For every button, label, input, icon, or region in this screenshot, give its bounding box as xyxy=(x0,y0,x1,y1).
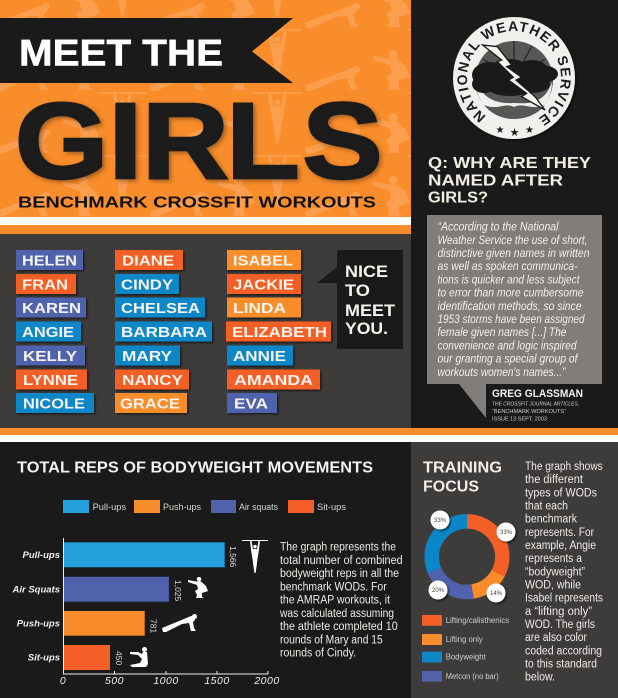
text block: training focus explanation: benchmark xyxy=(525,514,577,526)
quote box: “According to the National xyxy=(438,222,559,234)
text block: chart explanation: rounds of Mary and 15 xyxy=(280,634,383,646)
name tags column two: GRACE xyxy=(120,396,180,412)
text block: training focus explanation xyxy=(525,461,603,684)
quote box: as well as spoken communica- xyxy=(438,261,578,273)
heading: question: NAMED AFTER xyxy=(428,172,563,190)
text block: chart explanation: rounds of Cindy. xyxy=(280,648,356,660)
text block: training focus explanation: a “lifting only” xyxy=(525,606,592,618)
text block: training focus explanation: below. xyxy=(525,672,555,684)
quote attribution: THE CROSSFIT JOURNAL ARTICLES, xyxy=(492,402,579,408)
donut legend: Metcon (no bar) xyxy=(446,672,499,681)
logo: national weather service: ★ xyxy=(496,125,505,136)
bar values: 781 xyxy=(148,619,158,633)
category labels: Pull-ups xyxy=(23,550,60,561)
icon: pull-up xyxy=(242,540,268,573)
chart legend: Sit-ups xyxy=(317,502,346,513)
text block: chart explanation xyxy=(279,542,403,660)
text block: training focus explanation: Isabel represents xyxy=(525,593,603,605)
donut percentage bubbles: 14% xyxy=(490,591,503,597)
quote box: our granting a special group of xyxy=(438,354,579,366)
chart legend: Push-ups xyxy=(163,502,201,513)
text block: training focus explanation: WOD. The girls xyxy=(525,619,595,631)
chart legend: Pull-ups xyxy=(93,502,126,513)
speech bubble: nice to meet you: MEET xyxy=(345,302,395,320)
bar chart xyxy=(11,538,280,687)
bar values: 1,566 xyxy=(228,546,238,568)
name tags column one: HELEN xyxy=(22,254,77,270)
logo: national weather service: NATIONAL WEATHER SERVICE xyxy=(457,21,571,126)
ribbon banner xyxy=(0,18,293,83)
text block: chart explanation: benchmark WODs. For xyxy=(280,581,387,593)
text block: chart explanation: bodyweight reps in all the xyxy=(280,568,399,580)
name tags column two: NANCY xyxy=(122,373,183,389)
axis labels: 1500 xyxy=(204,675,230,687)
name tags column one: NICOLE xyxy=(23,396,85,412)
quote box: tions is quicker and less subject xyxy=(438,274,580,286)
heading: training focus: TRAINING xyxy=(423,460,502,477)
donut chart xyxy=(432,521,502,592)
text block: training focus explanation: “bodyweight” xyxy=(525,566,585,578)
speech bubble: nice to meet you: NICE xyxy=(345,263,388,281)
text block: training focus explanation: coded according xyxy=(525,645,602,657)
speech bubble: nice to meet you: YOU. xyxy=(345,320,388,338)
name tags column two: CHELSEA xyxy=(121,301,201,317)
name tags column three xyxy=(226,250,331,413)
quote attribution: ISSUE 13 SEPT. 2003 xyxy=(492,417,547,423)
name tags column three: EVA xyxy=(234,396,269,412)
axis labels: 1000 xyxy=(153,675,179,687)
name tags column three: ISABEL xyxy=(233,254,293,270)
quote box: workouts women's names...” xyxy=(438,367,567,379)
category labels xyxy=(11,550,60,664)
quote box: identification methods, so since xyxy=(438,301,582,313)
heading: question: GIRLS? xyxy=(428,190,488,206)
text block: training focus explanation: that each xyxy=(525,500,568,512)
bar values: 450 xyxy=(114,651,124,665)
name tags column one: KAREN xyxy=(22,301,81,317)
category labels: Sit-ups xyxy=(28,653,60,664)
logo: national weather service: ★ xyxy=(510,127,520,139)
icon: air squat xyxy=(188,577,208,598)
bar values: 1,025 xyxy=(173,580,183,602)
name tags column two: BARBARA xyxy=(121,325,208,341)
donut percentage bubbles: 33% xyxy=(500,530,513,536)
name tags column three: ELIZABETH xyxy=(232,325,327,341)
chart legend: Air squats xyxy=(239,502,278,513)
quote box: to error than more cumbersome xyxy=(438,288,584,300)
quote attribution: “BENCHMARK WORKOUTS” xyxy=(492,409,566,415)
text block: training focus explanation: The graph shows xyxy=(525,461,603,473)
text block: chart explanation: the athlete completed 10 xyxy=(280,621,398,633)
name tags column three: LINDA xyxy=(233,301,287,317)
name tags column three: ANNIE xyxy=(233,349,286,365)
name tags column one: ANGIE xyxy=(22,325,74,341)
donut percentage bubbles: 33% xyxy=(434,518,447,524)
quote box: distinctive given names in written xyxy=(438,248,590,260)
heading: girls: GIRLS xyxy=(15,81,382,202)
quote attribution xyxy=(492,388,583,423)
name tags column three: JACKIE xyxy=(233,278,294,294)
name tags column three: AMANDA xyxy=(234,373,314,389)
icon: push-up xyxy=(162,614,197,632)
text block: training focus explanation: the different xyxy=(525,474,584,486)
heading: question: Q: WHY ARE THEY xyxy=(428,155,592,172)
axis labels xyxy=(60,675,280,687)
speech bubble: nice to meet you xyxy=(317,250,403,349)
donut legend: Bodyweight xyxy=(446,653,486,662)
text block: chart explanation: total number of combined xyxy=(280,555,403,567)
quote box: 1953 storms have been assigned xyxy=(438,314,585,326)
axis labels: 500 xyxy=(105,675,124,687)
logo: national weather service: ★ xyxy=(525,125,534,136)
category labels: Push-ups xyxy=(17,619,60,630)
speech bubble: nice to meet you: TO xyxy=(345,282,370,300)
heading: question xyxy=(428,155,592,206)
category labels: Air Squats xyxy=(11,585,60,596)
name tags column one xyxy=(16,250,94,413)
panel: why named after girls xyxy=(427,17,602,423)
divider bands xyxy=(0,428,618,442)
text block: training focus explanation: example, Angie xyxy=(525,540,596,552)
quote box: Weather Service the use of short, xyxy=(438,235,588,247)
donut legend: Lifting/calisthenics xyxy=(446,616,509,625)
text block: chart explanation: the AMRAP workouts, it xyxy=(280,595,391,607)
panel: names xyxy=(0,234,411,428)
text block: training focus explanation: WOD, while xyxy=(525,580,581,592)
text block: training focus explanation: are also color xyxy=(525,632,587,644)
name tags column one: LYNNE xyxy=(23,373,78,389)
donut legend xyxy=(422,615,509,682)
name tags column one: KELLY xyxy=(23,349,77,365)
text block: chart explanation: was calculated assuming xyxy=(279,608,394,620)
quote box: female given names [...] The xyxy=(438,327,566,339)
donut percentage bubbles: 20% xyxy=(432,588,445,594)
axis labels: 2000 xyxy=(253,675,280,687)
heading: training focus xyxy=(423,460,502,496)
bar values xyxy=(114,546,238,665)
icon: sit-up xyxy=(130,647,148,667)
donut percentage bubbles xyxy=(428,510,516,602)
chart legend xyxy=(63,500,346,513)
subtitle: BENCHMARK CROSSFIT WORKOUTS xyxy=(18,194,376,212)
text block: training focus explanation: represents. For xyxy=(525,527,594,539)
heading: training focus: FOCUS xyxy=(423,479,479,496)
quote attribution: GREG GLASSMAN xyxy=(492,388,583,400)
quote box: convenience and logic inspired xyxy=(438,340,577,352)
text block: training focus explanation: represents a xyxy=(525,553,583,565)
panel: training focus xyxy=(411,442,618,698)
name tags column one: FRAN xyxy=(22,278,68,294)
name tags column two: CINDY xyxy=(121,278,173,294)
heading: meet the: MEET THE xyxy=(19,32,223,74)
text block: training focus explanation: types of WODs xyxy=(525,487,597,499)
axis labels: 0 xyxy=(60,675,66,687)
donut legend: Lifting only xyxy=(446,635,483,644)
name tags column two: DIANE xyxy=(122,254,174,270)
panel: total reps of bodyweight movements xyxy=(0,442,411,698)
heading: total reps: TOTAL REPS OF BODYWEIGHT MOVEMENTS xyxy=(17,460,373,477)
panel: orange header xyxy=(0,0,411,234)
quote box xyxy=(427,215,602,418)
name tags column two xyxy=(115,250,212,413)
name tags column two: MARY xyxy=(122,349,172,365)
text block: training focus explanation: to this standard xyxy=(525,659,597,671)
text block: chart explanation: The graph represents the xyxy=(280,542,396,554)
